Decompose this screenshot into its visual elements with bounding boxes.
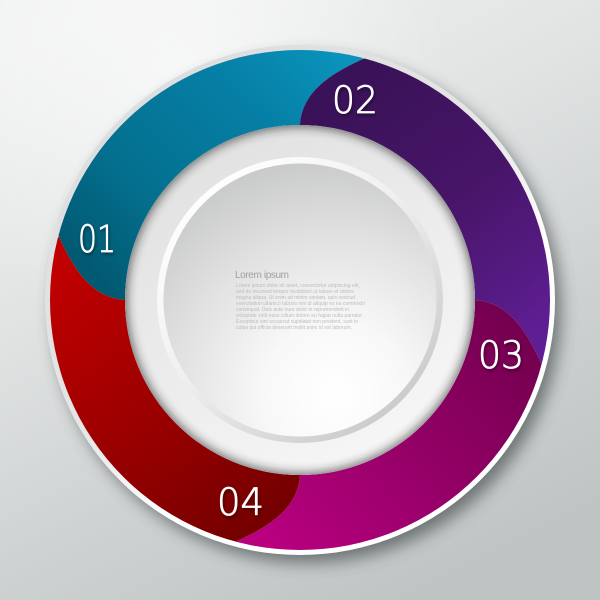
segment 01: blue [58, 50, 363, 300]
body text: consequat. Duis aute irure dolor in reprehenderit in [236, 307, 349, 313]
numbers [78, 79, 524, 524]
body text: exercitation ullamco laboris nisi ut aliquip ex ea commodo [236, 301, 365, 307]
outer white rim [45, 45, 555, 555]
ring segments [50, 50, 550, 550]
segment 04: red [50, 237, 300, 542]
number 01: 01 [78, 218, 116, 261]
body text: sed do eiusmod tempor incididunt ut labore et dolore [236, 289, 354, 295]
number 04: 04 [217, 481, 264, 524]
number 02: 02 [332, 79, 378, 122]
segment 02: purple [300, 58, 550, 364]
plate inner shadow from ring [121, 121, 479, 479]
centre disc [157, 157, 443, 443]
body text: Excepteur sint occaecat cupidatat non proident, sunt in [236, 319, 358, 325]
heading: Lorem ipsum [235, 270, 289, 281]
body text: culpa qui officia deserunt mollit anim id est laborum. [236, 325, 352, 331]
number 03: 03 [478, 334, 524, 377]
body text: Lorem ipsum dolor sit amet, consectetur adipiscing elit, [236, 283, 360, 289]
segment 03: magenta [237, 300, 542, 550]
disc drop shadow [53, 55, 561, 563]
body text: magna aliqua. Ut enim ad minim veniam, quis nostrud [236, 295, 355, 301]
body text [236, 283, 365, 331]
inner plate [121, 121, 479, 479]
body text: voluptate velit esse cillum dolore eu fugiat nulla pariatur. [236, 313, 363, 319]
